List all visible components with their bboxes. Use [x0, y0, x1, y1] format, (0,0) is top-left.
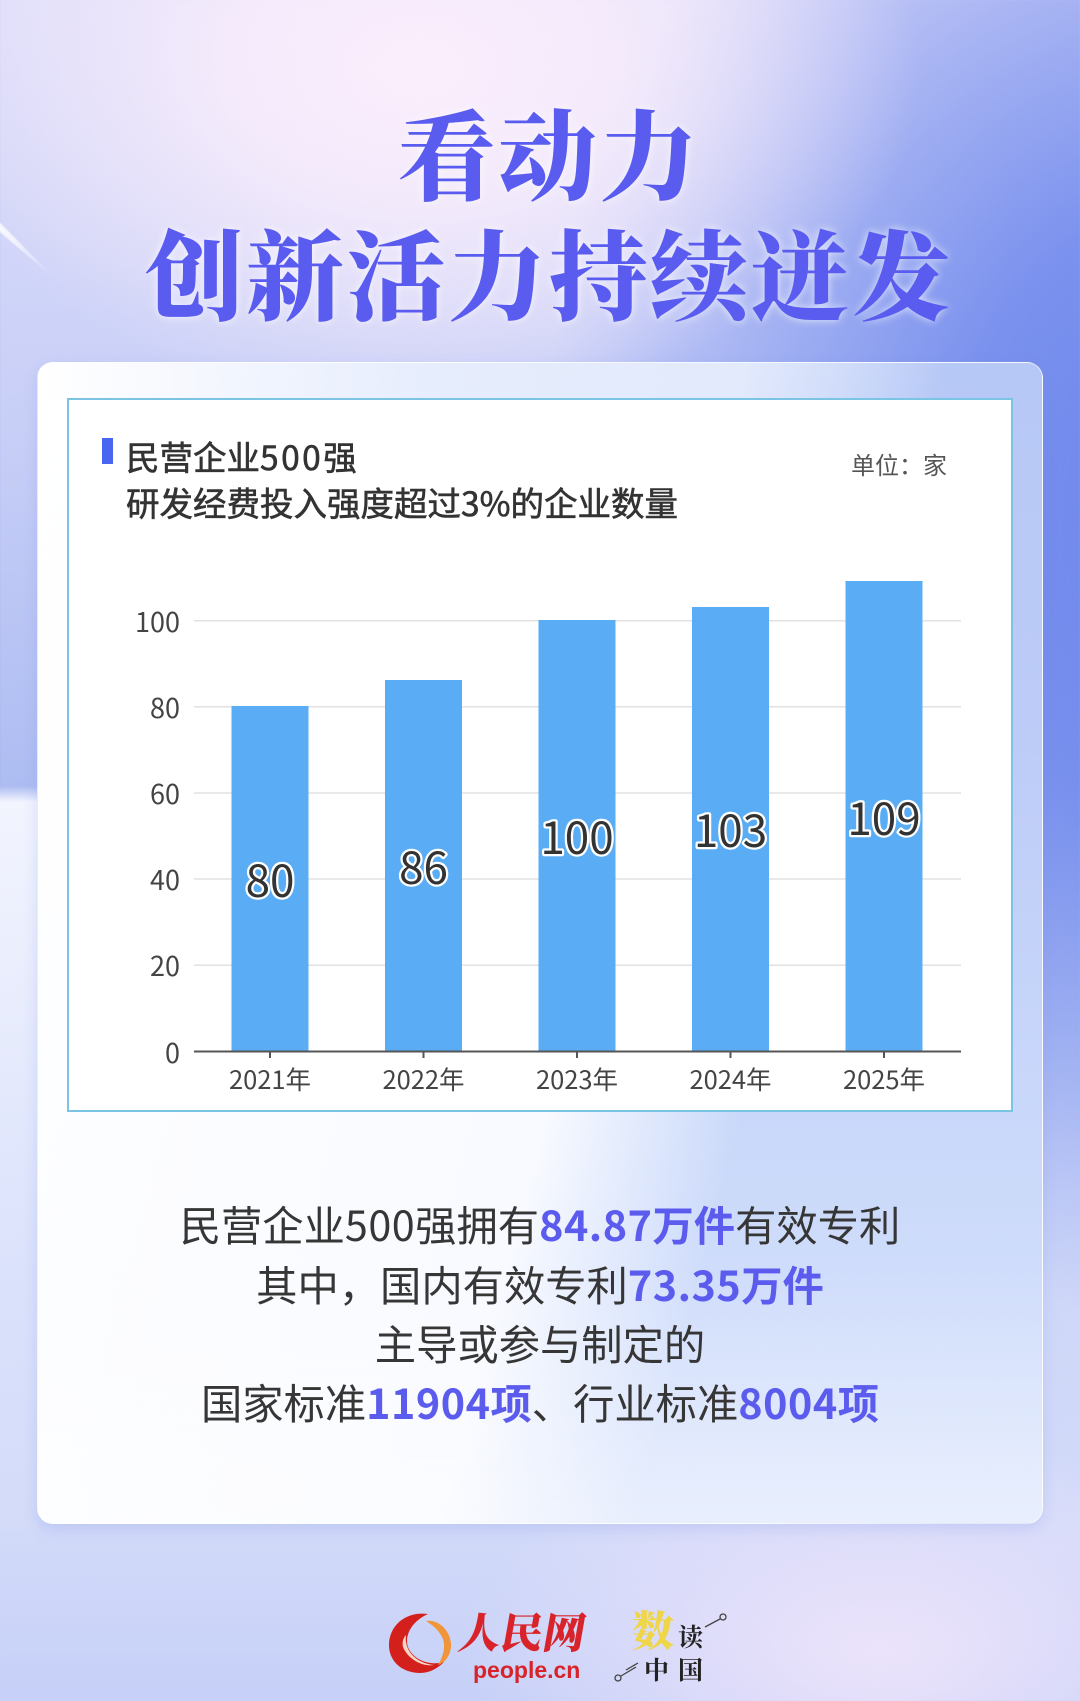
text line 2: 其中，国内有效专利73.35万件 — [256, 1253, 824, 1313]
connector lines — [614, 1613, 727, 1682]
y axis labels: 0 — [165, 1032, 180, 1071]
x axis labels: 2025年 — [843, 1060, 925, 1097]
中国: 中国 — [644, 1651, 712, 1687]
panel: main card — [37, 362, 1043, 1524]
title line 2: 创新活力持续迸发 — [145, 200, 953, 341]
text line 1: 民营企业500强拥有84.87万件有效专利 — [180, 1193, 900, 1253]
icon: people.cn swirl — [389, 1614, 452, 1673]
y axis labels: 20 — [150, 945, 180, 984]
chart title marker — [102, 438, 113, 464]
y axis labels: 80 — [150, 687, 180, 726]
x axis labels — [229, 1060, 925, 1097]
bar value labels: 103 — [694, 796, 767, 860]
title — [145, 80, 953, 341]
bar value labels: 86 — [399, 833, 448, 897]
x axis labels: 2023年 — [536, 1060, 618, 1097]
bar value labels: 80 — [246, 846, 294, 910]
读: 读 — [678, 1618, 703, 1654]
people.cn wordmark: people.cn — [473, 1657, 580, 1683]
y axis labels: 60 — [150, 773, 180, 812]
bar value labels: 100 — [540, 803, 614, 867]
人民网 wordmark: 人民网 — [455, 1601, 591, 1661]
text line 4: 国家标准11904项、行业标准8004项 — [201, 1371, 879, 1431]
chart heading line 1: 民营企业500强 — [126, 431, 357, 480]
text line 3: 主导或参与制定的 — [375, 1312, 705, 1372]
text block: patents and standards — [180, 1193, 900, 1431]
x axis labels: 2024年 — [689, 1060, 772, 1097]
chart heading line 2: 研发经费投入强度超过3%的企业数量 — [126, 477, 678, 526]
logo: people.cn — [389, 1601, 591, 1683]
panel: chart box — [67, 398, 1013, 1112]
bar value labels: 109 — [847, 784, 921, 848]
数: 数 — [632, 1599, 674, 1659]
x axis — [194, 1051, 961, 1058]
x axis labels: 2022年 — [382, 1060, 465, 1097]
y axis labels: 40 — [150, 859, 180, 898]
decorative light streak — [0, 222, 42, 266]
bar value labels — [246, 784, 921, 910]
y axis labels: 100 — [135, 601, 180, 640]
x axis labels: 2021年 — [229, 1060, 311, 1097]
unit label: 单位：家 — [851, 446, 947, 481]
y axis labels — [135, 601, 180, 1071]
logo: 数读中国 — [614, 1599, 727, 1687]
chart heading — [126, 431, 678, 526]
title line 1: 看动力 — [397, 80, 700, 221]
bars — [232, 581, 922, 1052]
